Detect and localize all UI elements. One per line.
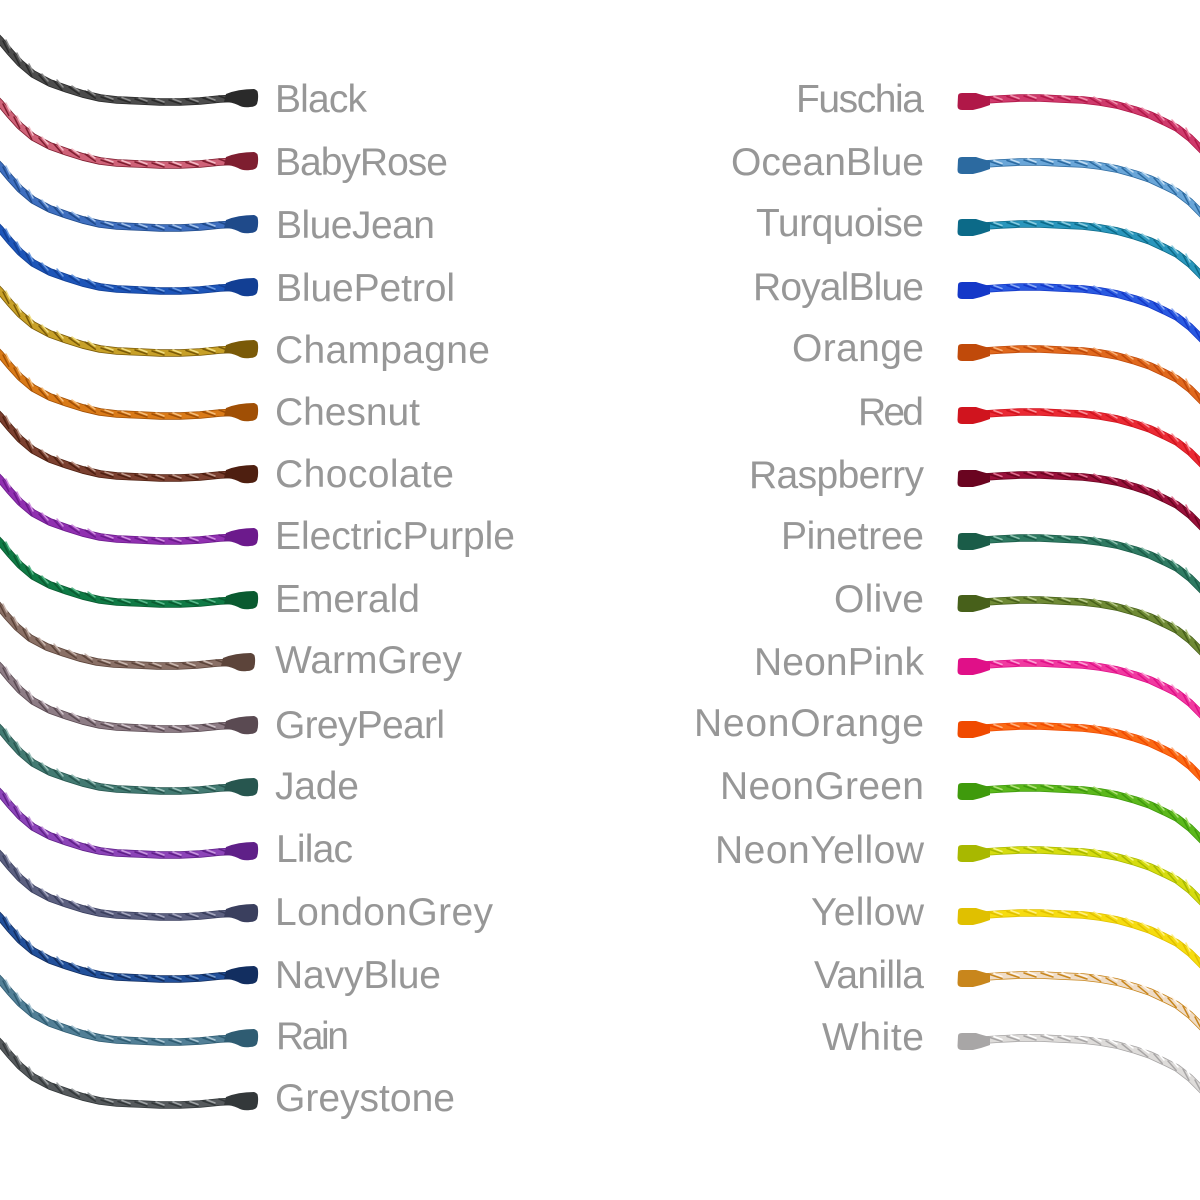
label: Vanilla: Vanilla: [814, 954, 924, 997]
cord: Vanilla: [958, 970, 1200, 1031]
label: NeonOrange: NeonOrange: [694, 702, 924, 745]
cord: Orange: [958, 344, 1200, 405]
cord: OceanBlue: [958, 157, 1200, 218]
row: RoyalBlue: [753, 266, 1200, 343]
row: Lilac: [0, 787, 353, 871]
row: Rain: [0, 974, 349, 1058]
label: BlueJean: BlueJean: [276, 204, 435, 247]
label: Chocolate: Chocolate: [275, 453, 454, 496]
label: BluePetrol: BluePetrol: [276, 267, 455, 310]
cord: NavyBlue: [0, 911, 258, 984]
label: RoyalBlue: RoyalBlue: [753, 266, 924, 309]
row: Yellow: [811, 891, 1200, 969]
row: Olive: [834, 578, 1200, 656]
cord: BabyRose: [0, 97, 258, 170]
label: Black: Black: [275, 78, 368, 121]
label: NeonYellow: NeonYellow: [715, 829, 925, 872]
label: Rain: Rain: [276, 1015, 349, 1058]
row: Fuschia: [796, 78, 1200, 154]
label: Turquoise: Turquoise: [756, 202, 924, 245]
row: WarmGrey: [0, 598, 462, 682]
label: Greystone: Greystone: [275, 1077, 455, 1120]
cord: WarmGrey: [0, 598, 255, 671]
row: BlueJean: [0, 160, 435, 247]
cord: NeonOrange: [958, 721, 1200, 782]
cord: Champagne: [0, 285, 258, 358]
row: Emerald: [0, 536, 420, 621]
label: Orange: Orange: [792, 327, 924, 370]
cord: Raspberry: [958, 470, 1200, 531]
cord: NeonPink: [958, 658, 1200, 719]
row: NeonPink: [754, 641, 1200, 719]
row: Chocolate: [0, 410, 454, 496]
label: Red: Red: [858, 391, 924, 434]
cord: RoyalBlue: [958, 282, 1200, 343]
row: GreyPearl: [0, 661, 445, 747]
row: Champagne: [0, 285, 490, 372]
cord: Olive: [958, 595, 1200, 656]
row: BluePetrol: [0, 223, 455, 310]
cord: Greystone: [0, 1037, 258, 1110]
row: NeonOrange: [694, 702, 1200, 782]
cord: Yellow: [958, 908, 1200, 969]
label: Emerald: Emerald: [275, 578, 420, 621]
label: BabyRose: BabyRose: [275, 141, 448, 184]
label: Jade: Jade: [275, 765, 359, 808]
row: LondonGrey: [0, 849, 494, 934]
row: Vanilla: [814, 954, 1200, 1031]
row: OceanBlue: [731, 141, 1200, 218]
cord: LondonGrey: [0, 849, 258, 922]
row: Raspberry: [749, 454, 1200, 531]
row: Orange: [792, 327, 1200, 405]
label: NeonPink: NeonPink: [754, 641, 924, 684]
row: Jade: [0, 723, 359, 808]
row: NavyBlue: [0, 911, 441, 997]
cord: Black: [0, 34, 258, 107]
row: Chesnut: [0, 348, 420, 434]
label: LondonGrey: LondonGrey: [275, 891, 494, 934]
cord: Red: [958, 407, 1200, 468]
label: White: White: [822, 1016, 924, 1059]
label: Olive: Olive: [834, 578, 924, 621]
label: Lilac: Lilac: [276, 828, 353, 871]
label: ElectricPurple: ElectricPurple: [275, 515, 515, 558]
cord: Turquoise: [958, 219, 1200, 280]
cord: ElectricPurple: [0, 473, 258, 546]
cord: NeonGreen: [958, 783, 1200, 844]
label: WarmGrey: WarmGrey: [275, 639, 462, 682]
cord: Lilac: [0, 787, 258, 860]
cord: BlueJean: [0, 160, 258, 233]
panel: right column of cords: [694, 78, 1200, 1094]
cord: Chesnut: [0, 348, 258, 421]
panel: left column of cords: [0, 34, 515, 1120]
cord: Rain: [0, 974, 258, 1047]
cord: BluePetrol: [0, 223, 258, 296]
label: GreyPearl: GreyPearl: [275, 704, 445, 747]
label: Pinetree: Pinetree: [781, 515, 924, 558]
cord: NeonYellow: [958, 845, 1200, 906]
row: White: [822, 1016, 1200, 1094]
label: NavyBlue: NavyBlue: [275, 954, 441, 997]
label: Yellow: Yellow: [811, 891, 925, 934]
row: BabyRose: [0, 97, 448, 184]
row: NeonGreen: [720, 765, 1200, 844]
row: Turquoise: [756, 202, 1200, 280]
label: OceanBlue: OceanBlue: [731, 141, 924, 184]
label: Raspberry: Raspberry: [749, 454, 924, 497]
label: Chesnut: Chesnut: [275, 391, 420, 434]
cord: Jade: [0, 723, 258, 796]
label: Fuschia: Fuschia: [796, 78, 924, 121]
row: Pinetree: [781, 515, 1200, 594]
cord: Pinetree: [958, 533, 1200, 594]
label: NeonGreen: NeonGreen: [720, 765, 924, 808]
cord: Fuschia: [958, 93, 1200, 154]
label: Champagne: Champagne: [275, 329, 490, 372]
cord: GreyPearl: [0, 661, 258, 734]
cord: Emerald: [0, 536, 258, 609]
row: Red: [858, 391, 1200, 468]
cord: White: [958, 1033, 1200, 1094]
row: Greystone: [0, 1037, 455, 1120]
row: Black: [0, 34, 368, 121]
row: ElectricPurple: [0, 473, 515, 558]
row: NeonYellow: [715, 829, 1200, 906]
cord: Chocolate: [0, 410, 258, 483]
